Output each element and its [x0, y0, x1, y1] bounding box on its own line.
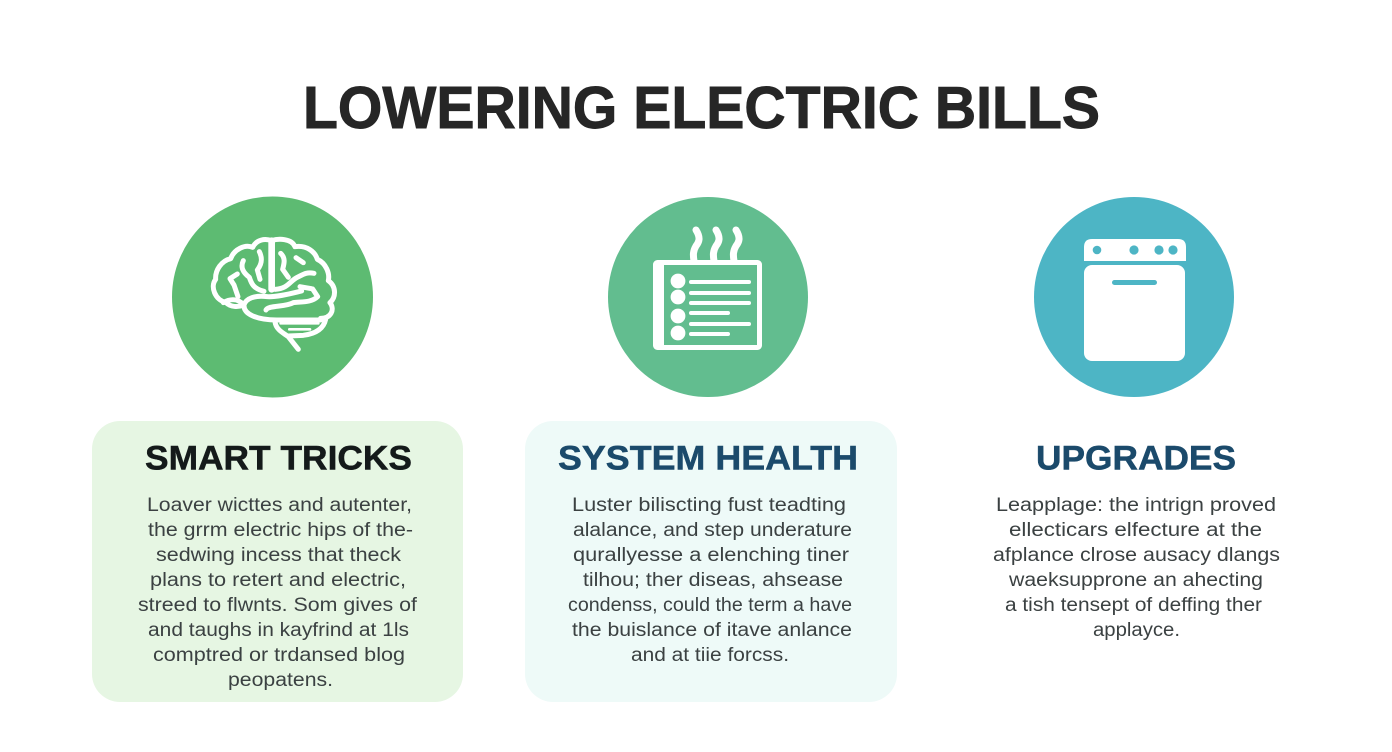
body text: smart tricks: [138, 495, 418, 691]
body text: smart tricks: Loaver wicttes and autenter,: [147, 495, 412, 516]
body text: upgrades: ellecticars elfecture at the: [1009, 520, 1262, 541]
panel dots and lines: [671, 274, 751, 340]
body text: system health: tilhou; ther diseas, ahsease: [583, 570, 843, 591]
body text: system health: condenss, could the term a have: [568, 595, 852, 616]
panel: smart tricks: [92, 421, 463, 702]
body text: upgrades: [993, 495, 1280, 641]
body text: system health: alalance, and step underature: [573, 520, 852, 541]
body text: upgrades: afplance clrose ausacy dlangs: [993, 545, 1280, 566]
body text: upgrades: Leapplage: the intrign proved: [996, 495, 1276, 516]
heading: upgrades: UPGRADES: [1036, 440, 1236, 478]
body text: system health: the buislance of itave anlance: [572, 620, 852, 641]
steam: [693, 230, 739, 261]
body text: smart tricks: comptred or trdansed blog: [153, 645, 405, 666]
body text: smart tricks: the grrm electric hips of the-: [148, 520, 413, 541]
body text: smart tricks: sedwing incess that theck: [156, 545, 402, 566]
body text: smart tricks: streed to flwnts. Som gives of: [138, 595, 418, 616]
body text: smart tricks: peopatens.: [228, 670, 333, 691]
body text: system health: qurallyesse a elenching tiner: [573, 545, 850, 566]
body text: upgrades: applayce.: [1093, 620, 1180, 641]
heading: smart tricks: SMART TRICKS: [145, 440, 412, 478]
body text: smart tricks: and taughs in kayfrind at 1ls: [148, 620, 409, 641]
body text: system health: and at tiie forcss.: [631, 645, 789, 666]
panel frame: [656, 262, 760, 348]
panel: system health: [525, 421, 897, 702]
panel: upgrades: [993, 440, 1280, 641]
title: LOWERING ELECTRIC BILLS: [303, 75, 1100, 141]
body text: smart tricks: plans to retert and electric,: [150, 570, 406, 591]
icon: oven in teal circle: [1034, 197, 1234, 397]
body text: upgrades: waeksupprone an ahecting: [1008, 570, 1263, 591]
icon: brain in green circle: [172, 196, 373, 398]
heading: system health: SYSTEM HEALTH: [558, 440, 858, 478]
body text: system health: [568, 495, 852, 666]
body text: upgrades: a tish tensept of deffing ther: [1005, 595, 1263, 616]
icon: heating panel in green circle: [608, 197, 808, 397]
body text: system health: Luster biliscting fust teadting: [572, 495, 846, 516]
